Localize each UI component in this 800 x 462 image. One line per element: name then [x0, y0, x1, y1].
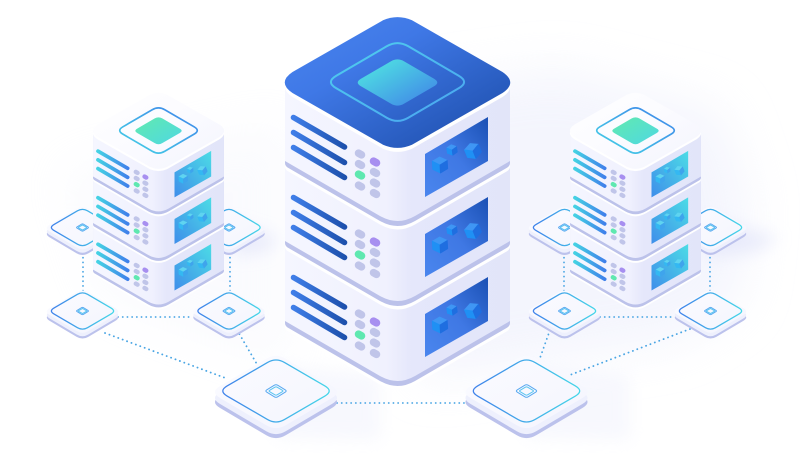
left server middle tier	[93, 147, 224, 263]
right server bottom tier	[570, 193, 701, 309]
left server stack	[93, 93, 224, 309]
node pad: large left	[215, 356, 337, 438]
left server top tier	[93, 100, 224, 216]
node pad: large right	[465, 356, 588, 438]
central server middle tier	[285, 110, 510, 310]
node pad: left group upper right	[193, 207, 265, 255]
node pad: right group lower right	[675, 290, 746, 339]
node pad: left group lower right	[193, 290, 265, 339]
node pad: right group upper right	[675, 207, 746, 255]
soft floor shadows	[60, 70, 780, 440]
right server top face	[570, 93, 701, 171]
node pad: right group lower left	[529, 290, 600, 339]
right server stack	[570, 93, 701, 309]
central server top tier	[285, 30, 510, 230]
node pad: left group lower left	[47, 290, 118, 339]
central server bottom tier	[285, 190, 510, 390]
network dotted connections	[83, 253, 710, 403]
left server top face	[93, 93, 224, 171]
central server stack	[285, 17, 510, 390]
node pad: left group upper left	[47, 207, 118, 255]
left server bottom tier	[93, 193, 224, 309]
right server top tier	[570, 100, 701, 216]
node pad: right group upper left	[529, 207, 600, 255]
right server middle tier	[570, 147, 701, 263]
central server top face	[285, 17, 510, 152]
